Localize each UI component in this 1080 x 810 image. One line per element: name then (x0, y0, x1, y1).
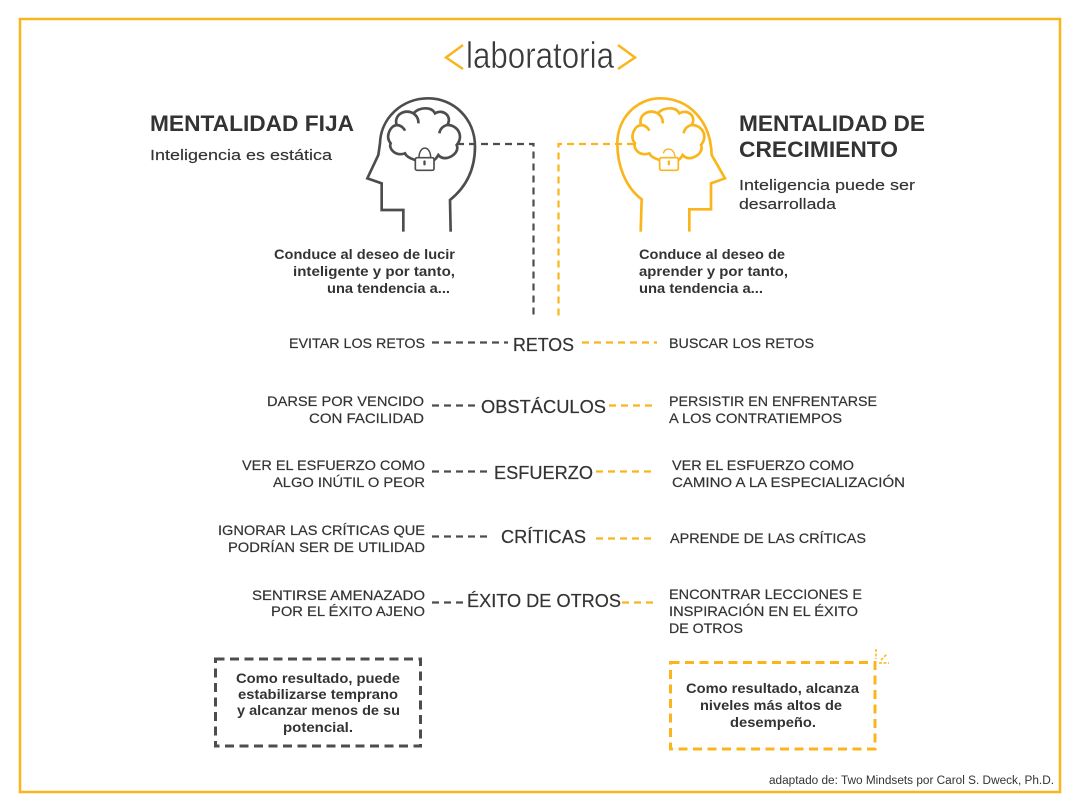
row: obstáculos: A LOS CONTRATIEMPOS (669, 410, 842, 426)
callout: fixed mindset result: potencial. (283, 720, 353, 735)
row: obstáculos: PERSISTIR EN ENFRENTARSE (669, 393, 877, 409)
text: growth mindset tendency: aprender y por tanto, (639, 264, 788, 279)
heading: mentalidad fija (150, 111, 354, 164)
logo: laboratoria (466, 35, 614, 76)
row: retos: EVITAR LOS RETOS (289, 335, 425, 351)
heading: mentalidad de crecimiento: Inteligencia puede ser (739, 177, 915, 194)
heading: mentalidad de crecimiento: desarrollada (739, 196, 837, 213)
callout: growth mindset result (670, 662, 875, 749)
row: éxito de otros: ÉXITO DE OTROS (467, 591, 621, 611)
row: críticas (218, 522, 866, 555)
row: críticas: IGNORAR LAS CRÍTICAS QUE (218, 522, 425, 538)
row: éxito de otros (252, 586, 862, 636)
row: esfuerzo: VER EL ESFUERZO COMO (672, 457, 854, 473)
row: obstáculos: CON FACILIDAD (309, 410, 424, 426)
icon: growth mindset head (617, 98, 725, 232)
row: obstáculos: DARSE POR VENCIDO (267, 393, 424, 409)
heading: mentalidad fija: MENTALIDAD FIJA (150, 111, 354, 136)
row: éxito de otros: INSPIRACIÓN EN EL ÉXITO (669, 603, 858, 619)
row: esfuerzo: CAMINO A LA ESPECIALIZACIÓN (672, 474, 905, 490)
text: fixed mindset tendency: Conduce al deseo de lucir (274, 247, 456, 262)
text: growth mindset tendency: una tendencia a... (639, 281, 763, 296)
row: obstáculos: OBSTÁCULOS (481, 397, 606, 417)
callout: fixed mindset result: Como resultado, puede (236, 671, 401, 686)
text: fixed mindset tendency: inteligente y por tanto, (293, 264, 455, 279)
row: éxito de otros: SENTIRSE AMENAZADO (252, 587, 425, 603)
row: críticas: APRENDE DE LAS CRÍTICAS (670, 530, 866, 546)
row: obstáculos (267, 393, 877, 426)
row: retos: RETOS (513, 335, 574, 355)
row: retos: BUSCAR LOS RETOS (669, 335, 814, 351)
callout: growth mindset result: niveles más altos de (700, 698, 843, 713)
callout: growth mindset result: desempeño. (730, 715, 816, 730)
heading: mentalidad fija: Inteligencia es estática (150, 147, 333, 164)
text: growth mindset tendency (639, 247, 788, 296)
text: growth mindset tendency: Conduce al deseo de (639, 247, 786, 262)
text: fixed mindset tendency (274, 247, 456, 296)
icon: spark (876, 649, 889, 663)
heading: mentalidad de crecimiento: MENTALIDAD DE (739, 111, 925, 136)
callout: fixed mindset result (216, 659, 420, 746)
text: fixed mindset tendency: una tendencia a... (327, 281, 450, 296)
row: esfuerzo: ESFUERZO (494, 463, 593, 483)
row: críticas: CRÍTICAS (501, 527, 586, 547)
icon: fixed mindset head (367, 98, 475, 232)
row: críticas: PODRÍAN SER DE UTILIDAD (228, 539, 425, 555)
callout: fixed mindset result: y alcanzar menos de su (237, 703, 400, 718)
connector: growth mindset (558, 144, 634, 318)
heading: mentalidad de crecimiento (739, 111, 925, 213)
connector: fixed mindset (457, 144, 534, 318)
row: éxito de otros: POR EL ÉXITO AJENO (271, 603, 425, 619)
callout: growth mindset result: Como resultado, alcanza (686, 681, 860, 696)
row: esfuerzo (242, 457, 905, 490)
row: esfuerzo: VER EL ESFUERZO COMO (242, 457, 425, 473)
row: esfuerzo: ALGO INÚTIL O PEOR (273, 474, 425, 490)
row: éxito de otros: ENCONTRAR LECCIONES E (669, 586, 862, 602)
source credit: adaptado de: Two Mindsets por Carol S. Dweck, Ph.D. (769, 775, 1054, 787)
row: éxito de otros: DE OTROS (669, 620, 743, 636)
heading: mentalidad de crecimiento: CRECIMIENTO (739, 137, 898, 162)
row: retos (289, 335, 814, 355)
callout: fixed mindset result: estabilizarse temprano (238, 687, 398, 702)
